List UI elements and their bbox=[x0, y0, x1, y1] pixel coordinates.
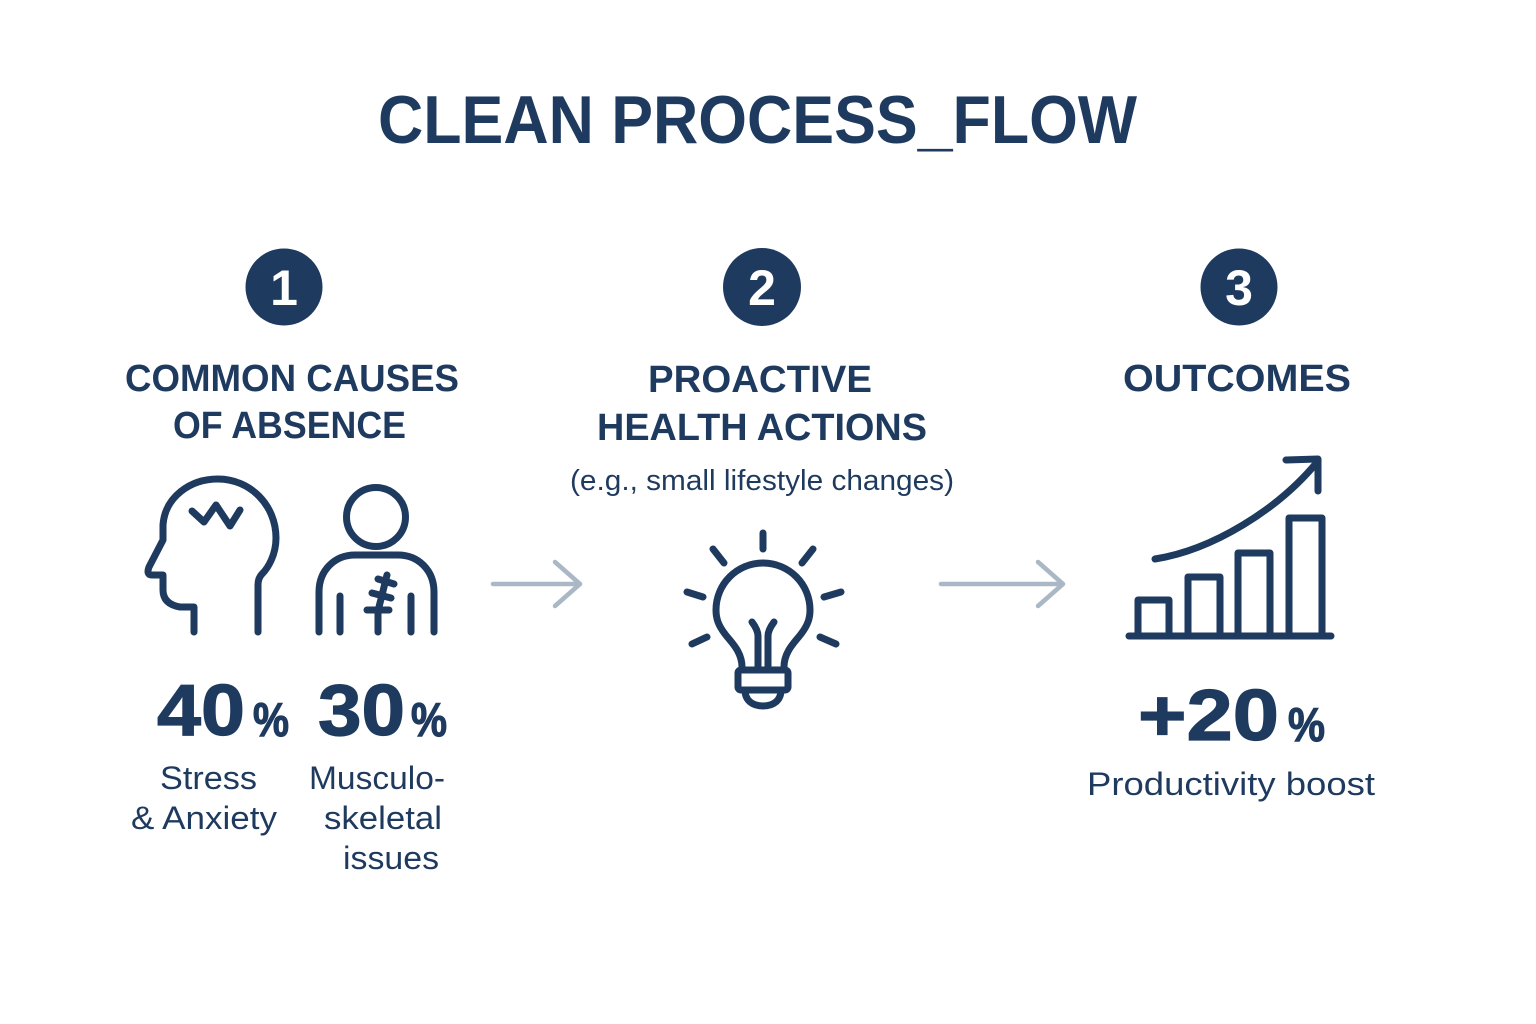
panel: step 2 proactive health actions bbox=[570, 248, 954, 706]
heading: proactive health actions: PROACTIVE bbox=[648, 359, 872, 401]
stat: 30 percent musculoskeletal issues: issues bbox=[343, 840, 439, 876]
icon: person with spine bbox=[319, 488, 434, 632]
stat: 40 percent stress and anxiety: 40 bbox=[157, 671, 245, 751]
stat: plus 20 percent productivity boost: Productivity boost bbox=[1087, 766, 1375, 802]
heading: proactive health actions bbox=[597, 359, 927, 449]
stat: 30 percent musculoskeletal issues bbox=[309, 671, 447, 876]
stat: 30 percent musculoskeletal issues: % bbox=[411, 693, 447, 746]
icon: head with stress zigzag bbox=[148, 479, 276, 632]
arrow: step 2 to step 3 bbox=[941, 562, 1063, 606]
heading: common causes of absence: COMMON CAUSES bbox=[125, 358, 459, 400]
stat: 40 percent stress and anxiety: Stress bbox=[160, 760, 257, 796]
heading: common causes of absence: OF ABSENCE bbox=[173, 405, 406, 447]
panel: step 1 common causes bbox=[125, 248, 459, 876]
stat: 30 percent musculoskeletal issues: 30 bbox=[318, 671, 405, 751]
stat: 40 percent stress and anxiety: % bbox=[253, 693, 289, 746]
step number badge 1 bbox=[246, 248, 322, 326]
step number badge 1: 1 bbox=[270, 260, 298, 316]
step number badge 3 bbox=[1200, 248, 1278, 326]
stat: 30 percent musculoskeletal issues: skeletal bbox=[324, 800, 442, 836]
heading: proactive health actions: HEALTH ACTIONS bbox=[597, 407, 927, 449]
heading: outcomes: OUTCOMES bbox=[1123, 358, 1351, 400]
stat: 30 percent musculoskeletal issues: Musculo- bbox=[309, 760, 445, 796]
step number badge 2: 2 bbox=[748, 260, 776, 316]
icon: light bulb bbox=[687, 533, 841, 706]
heading: common causes of absence bbox=[125, 358, 459, 447]
stat: plus 20 percent productivity boost bbox=[1087, 676, 1375, 802]
icon: rising bar chart with arrow bbox=[1129, 459, 1331, 636]
panel: step 3 outcomes bbox=[1087, 248, 1375, 802]
arrow: step 1 to step 2 bbox=[493, 562, 580, 606]
stat: 40 percent stress and anxiety bbox=[131, 671, 289, 836]
step number badge 3: 3 bbox=[1225, 260, 1253, 316]
stat: plus 20 percent productivity boost: % bbox=[1288, 698, 1325, 751]
subheading: (e.g., small lifestyle changes) bbox=[570, 465, 954, 497]
step number badge 2 bbox=[723, 248, 801, 326]
stat: 40 percent stress and anxiety: & Anxiety bbox=[131, 800, 277, 836]
stat: plus 20 percent productivity boost: +20 bbox=[1138, 676, 1279, 756]
title: CLEAN PROCESS_FLOW bbox=[378, 82, 1138, 158]
